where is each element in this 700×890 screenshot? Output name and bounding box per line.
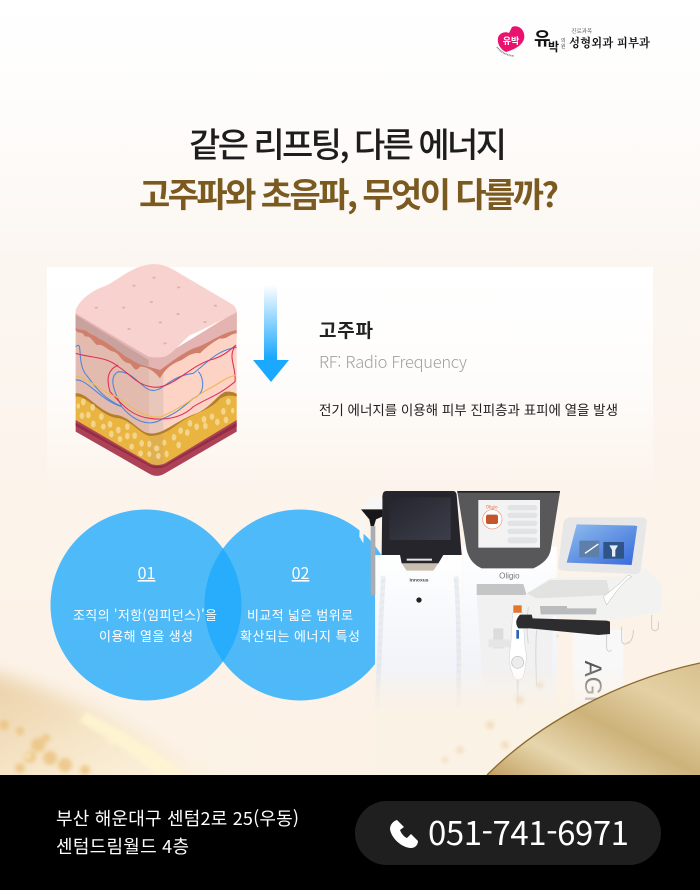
dermis faces (76, 310, 237, 467)
machine: Innoxus (359, 491, 462, 720)
machine: Agnes stand (550, 615, 658, 747)
epidermis wavy edge (76, 313, 237, 378)
title (139, 118, 559, 217)
circle 02 text: 비교적 넓은 범위로 (247, 605, 353, 624)
circle 02 text: 확산되는 에너지 특성 (240, 626, 360, 645)
handle bar (516, 615, 610, 635)
circle 02 text: 02 (292, 560, 309, 584)
gold disc, bottom right (487, 663, 700, 775)
logo (497, 25, 650, 56)
gold particles (442, 682, 543, 763)
machine: Oligio: Oligio (486, 503, 498, 510)
logo wordmark: 의 (561, 37, 566, 44)
title line 2: 고주파와 초음파, 무엇이 다를까? (139, 168, 559, 217)
panel: radio frequency (47, 264, 653, 492)
top skin surface (76, 264, 236, 357)
logo wordmark: 원 (561, 43, 566, 50)
icon: skin layer cube (76, 264, 237, 476)
phone number: 051-741-6971 (428, 807, 629, 855)
circle 01 text: 이용해 열을 생성 (99, 626, 193, 645)
icon: pink heart logo (497, 26, 524, 56)
heading: 고주파: 고주파 (319, 316, 374, 343)
phone pill (355, 801, 661, 865)
circle 01 text (73, 560, 217, 645)
footer bar (0, 775, 700, 890)
logo wordmark: 진료과목 (571, 27, 593, 35)
decorative gold silk sweep, bottom left (0, 665, 191, 775)
circle 02 (204, 510, 396, 700)
description: 전기 에너지를 이용해 피부 진피층과 표피에 열을 발생 (319, 399, 618, 419)
address: 부산 해운대구 센텀2로 25(우동) (56, 805, 299, 831)
machine: Oligio: Oligio (499, 571, 520, 580)
subheading: RF: Radio Frequency (319, 349, 467, 373)
machine base fade (375, 665, 675, 725)
circle 02 text (240, 560, 360, 645)
logo wordmark: 박 (548, 38, 559, 55)
address: 센텀드림월드 4층 (56, 833, 189, 859)
icon: phone (390, 820, 418, 848)
circle 01 text: 01 (138, 560, 155, 584)
machine: Innoxus: Innoxus (409, 578, 429, 584)
fat layer (76, 392, 237, 468)
logo wordmark: 성형외과 피부과 (569, 34, 650, 51)
handpiece (509, 605, 526, 710)
machines (359, 491, 675, 775)
title line 1: 같은 리프팅, 다른 에너지 (189, 118, 507, 167)
icon: pink heart logo: 유박 (503, 34, 520, 47)
muscle layer (76, 420, 237, 476)
machine: Oligio (457, 491, 560, 720)
logo wordmark: 유 (534, 25, 551, 51)
arrow: energy downward (253, 285, 289, 382)
address (56, 805, 299, 859)
machine: Agnes console (516, 517, 662, 635)
machine: Agnes stand: AGI (579, 661, 606, 702)
handpiece (359, 497, 382, 595)
circle 01 text: 조직의 '저항(임피던스)'을 (73, 605, 217, 624)
vessels (76, 345, 237, 423)
logo wordmark (534, 25, 650, 55)
circle 01 (50, 510, 242, 700)
